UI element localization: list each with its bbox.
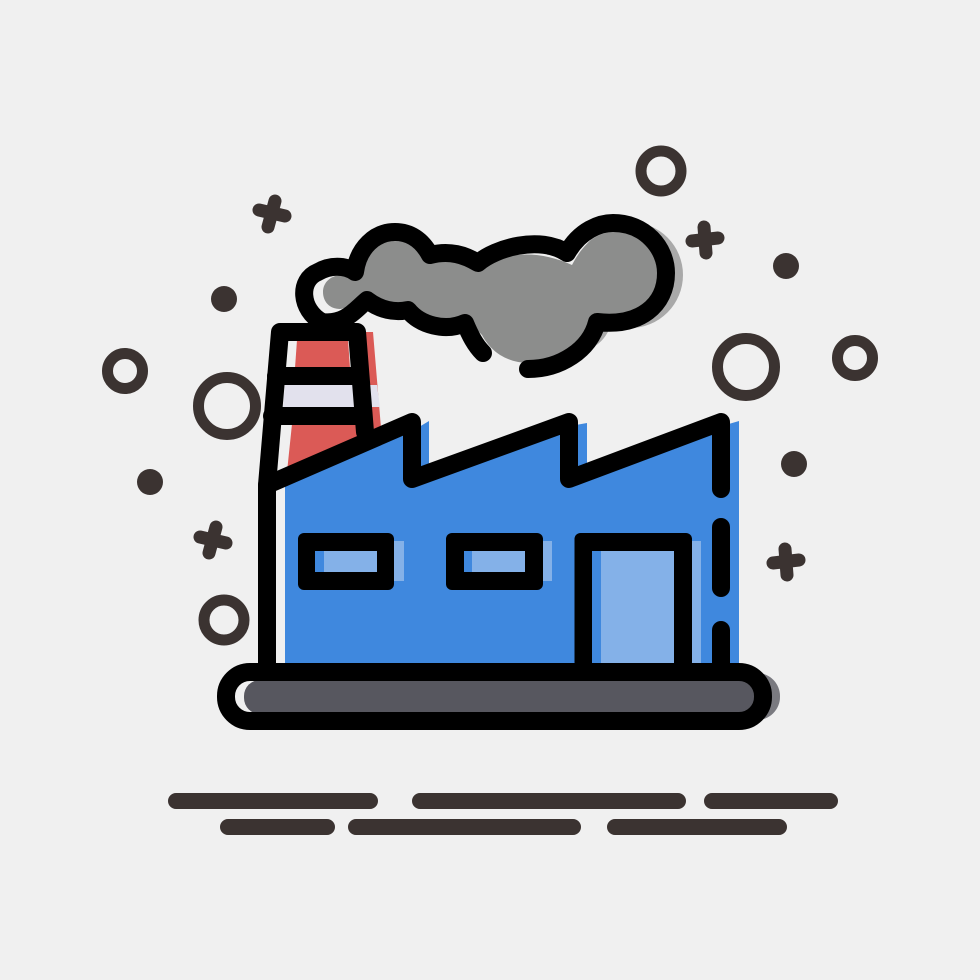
middle window [446, 533, 552, 590]
cloud outline [304, 223, 666, 369]
chimney [267, 332, 381, 485]
ground lines [176, 801, 830, 827]
decorative rings [108, 151, 872, 640]
base outline [226, 672, 763, 721]
chimney shadow [350, 332, 381, 432]
left window [298, 533, 404, 590]
door [574, 533, 701, 668]
factory building [267, 421, 739, 668]
cloud fill [323, 232, 657, 363]
chimney outline [267, 332, 365, 485]
chimney red stripes [295, 340, 350, 368]
chimney white stripe [283, 385, 354, 407]
base shadow [720, 673, 780, 720]
ground base [226, 672, 780, 721]
building outline [267, 422, 721, 668]
decorative plus signs [200, 201, 799, 575]
decorative dots [137, 253, 807, 495]
building fill [285, 421, 739, 668]
smoke cloud [304, 222, 683, 369]
cloud shadow [387, 222, 683, 352]
base fill [244, 680, 754, 714]
